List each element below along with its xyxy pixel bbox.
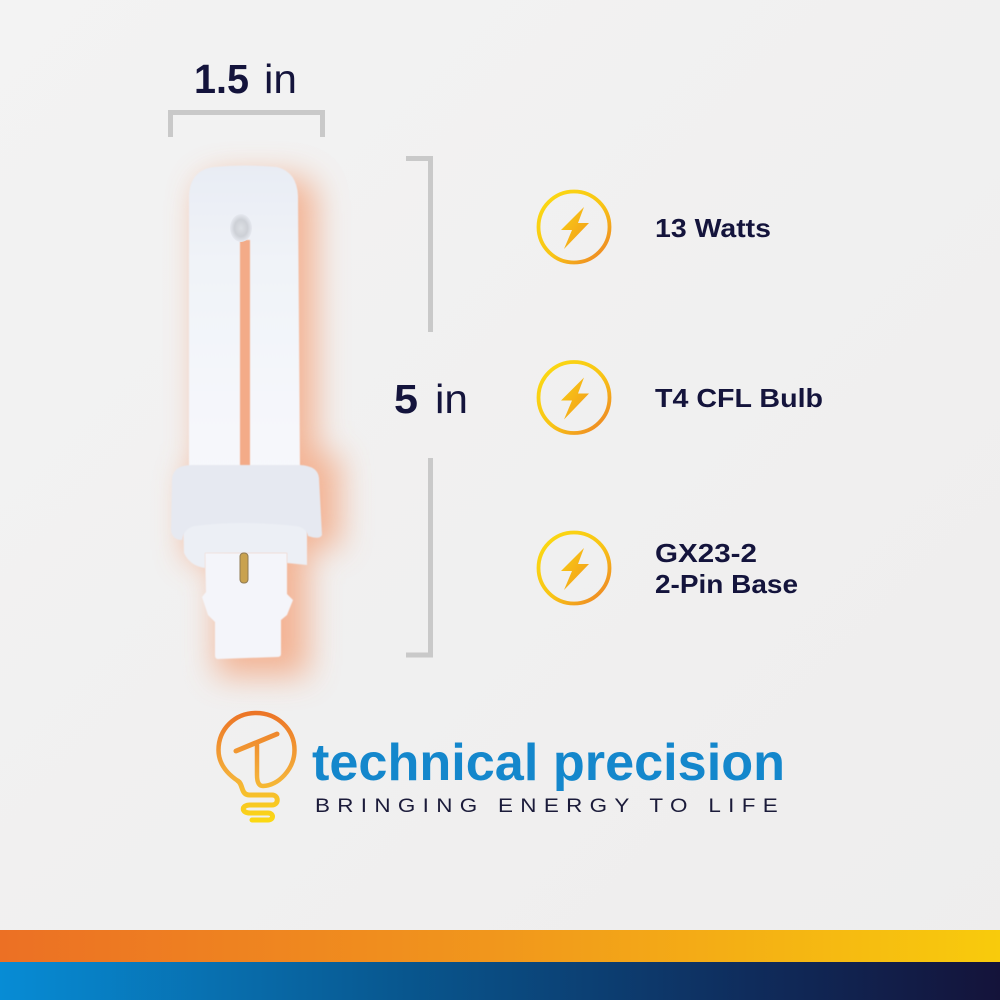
icon: lightning bolt: [538, 362, 610, 433]
logo tagline: BRINGING ENERGY TO LIFE: [315, 796, 785, 817]
width label: 1.5 in: in: [264, 56, 297, 102]
gap between tubes: [239, 235, 251, 470]
tube inner bend shading: [230, 214, 252, 242]
orange glow: [186, 176, 340, 676]
footer band: blue: [0, 962, 1000, 1000]
spec: GX23-2 2-Pin Base: [538, 532, 798, 604]
brass pin: [240, 553, 248, 583]
spec: T4 CFL Bulb: [538, 362, 823, 433]
logo wordmark: technical precision: [312, 734, 785, 792]
label: 2-Pin Base: [655, 569, 798, 599]
product photo: CFL bulb: [171, 166, 340, 676]
icon: lightning bolt: [538, 192, 610, 262]
icon: lightning bolt: [538, 532, 610, 604]
logo icon: bulb with T: [218, 713, 294, 820]
height label: 5 in: 5: [394, 376, 418, 422]
plastic stem with barbs: [202, 553, 293, 659]
label: 13 Watts: [655, 213, 771, 243]
width bracket: [170, 112, 322, 137]
footer band: orange: [0, 930, 1000, 962]
label: GX23-2: [655, 538, 757, 568]
height label: 5 in: in: [435, 376, 468, 422]
width label: 1.5 in: 1.5: [194, 56, 249, 102]
glass tube: [189, 166, 300, 470]
spec: 13 Watts: [538, 192, 771, 262]
lower collar: [183, 520, 307, 568]
height bracket top: [406, 158, 430, 332]
upper collar: [171, 465, 322, 540]
height bracket bottom: [406, 458, 430, 655]
logo: [218, 713, 785, 820]
label: T4 CFL Bulb: [655, 383, 823, 413]
